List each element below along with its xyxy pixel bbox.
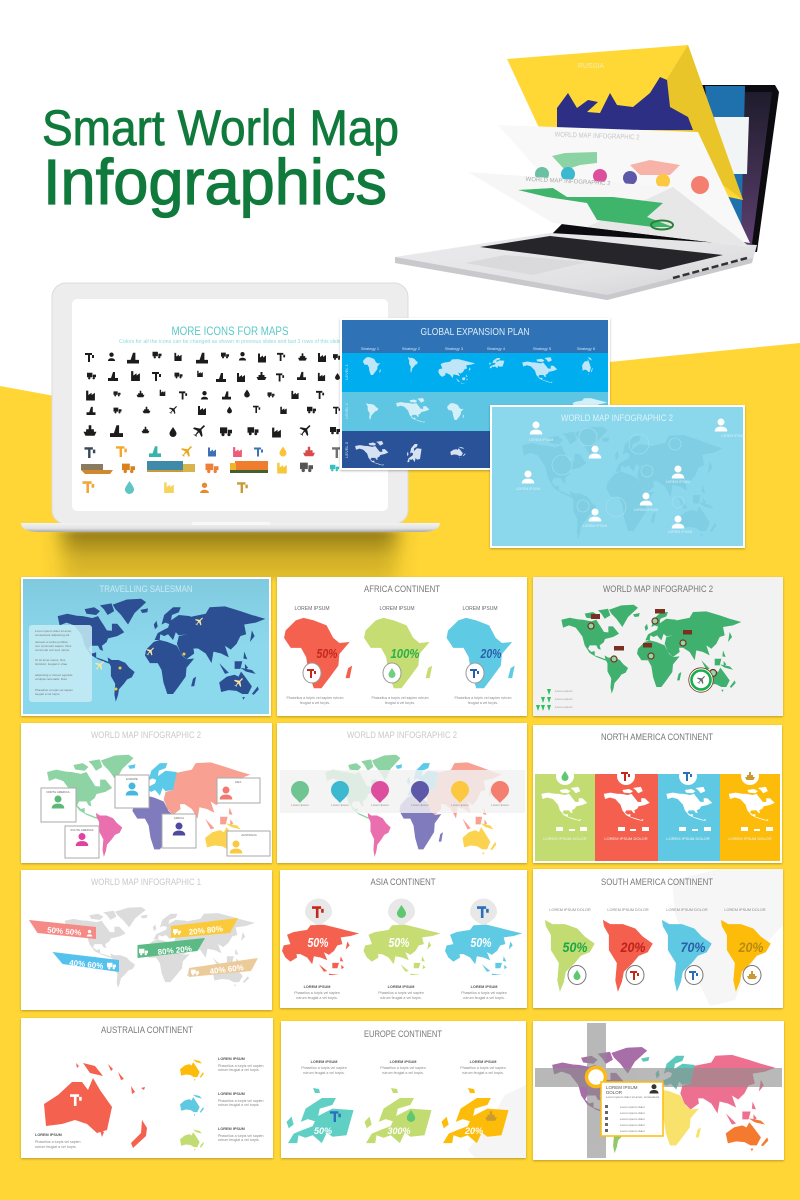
captions: feugiat a vel turpis. xyxy=(385,701,415,705)
south america card xyxy=(65,826,99,858)
person labels: LOREM IPSUM xyxy=(668,530,692,534)
icon row 1 xyxy=(85,352,341,364)
text card: tincidunt, feugiat in vitae xyxy=(35,662,68,666)
captions: rutrum feugiat a vel turpis. xyxy=(382,1071,424,1075)
icon row 2 xyxy=(87,371,340,382)
africa card xyxy=(162,814,196,848)
right captions: LOREM IPSUM xyxy=(218,1127,245,1131)
text card: volutpat venenatis. Duis xyxy=(35,677,67,681)
info card: DOLOR xyxy=(606,1090,623,1095)
column labels: LOREM IPSUM DOLOR xyxy=(666,908,708,912)
pins xyxy=(291,781,509,803)
panel title: TRAVELLING SALESMAN xyxy=(100,584,193,595)
icon badges xyxy=(303,663,484,683)
captions xyxy=(301,1060,506,1075)
strategy labels: Strategy 1 xyxy=(361,346,380,351)
text card: feugiat a vel turpis. xyxy=(35,692,60,696)
ribbon red xyxy=(29,920,96,939)
right captions: rutrum feugiat a vel turpis. xyxy=(218,1138,260,1142)
slide: Russia xyxy=(507,45,743,200)
pin labels: Lorem Ipsum xyxy=(411,803,429,807)
level 1 band xyxy=(342,353,608,392)
text card: Phasellus a turpis vel sapien xyxy=(35,688,73,692)
strategy labels xyxy=(361,346,596,351)
pin labels: Lorem Ipsum xyxy=(331,803,349,807)
ribbon green xyxy=(138,938,205,958)
text card: Aenean a varius porttitor, xyxy=(35,640,69,644)
asia maps xyxy=(282,925,522,975)
captions: LOREM IPSUM xyxy=(388,985,414,989)
plane markers xyxy=(95,618,243,687)
text card: Ut sit amet metus, finis xyxy=(35,658,66,662)
laptop shadow on background xyxy=(62,531,397,579)
captions: feugiat a vel turpis. xyxy=(468,701,498,705)
flags xyxy=(591,609,692,650)
column labels: LOREM IPSUM DOLOR xyxy=(543,836,587,841)
captions: rutrum feugiat a vel turpis. xyxy=(303,1071,345,1075)
screen subtitle: Colors for all the icons can be changed as shown in previous slides and last 3 rows of this slide xyxy=(119,339,341,345)
australia card xyxy=(227,831,270,856)
ribbon tan xyxy=(189,958,258,977)
panel: world map infographic 2 green xyxy=(533,577,783,716)
strategy labels: Strategy 6 xyxy=(577,346,596,351)
level 3 band xyxy=(342,431,608,468)
people icons xyxy=(522,419,727,528)
panel title: ASIA CONTINENT xyxy=(370,877,436,888)
south america card: SOUTH AMERICA xyxy=(70,828,94,832)
lorem labels: LOREM IPSUM xyxy=(294,606,330,612)
pin labels: Lorem Ipsum xyxy=(291,803,309,807)
africa maps xyxy=(284,618,515,688)
level labels: LEVEL 3 xyxy=(344,441,349,458)
colored vehicles row 7 xyxy=(81,461,339,474)
legend labels: Lorem ipsum xyxy=(555,697,573,701)
legend xyxy=(536,689,551,711)
grey world map xyxy=(65,907,255,988)
panel title: WORLD MAP INFOGRAPHIC 2 xyxy=(561,413,673,424)
percentages: 50% xyxy=(562,939,588,955)
green world map xyxy=(561,605,741,694)
panel background xyxy=(492,407,743,546)
level labels: LEVEL 1 xyxy=(344,363,349,380)
pin labels: Lorem Ipsum xyxy=(491,803,509,807)
person labels: LOREM IPSUM xyxy=(583,524,607,528)
captions: LOREM IPSUM xyxy=(390,1060,416,1064)
person labels: LOREM IPSUM xyxy=(529,438,553,442)
percentages xyxy=(562,939,764,955)
white bars xyxy=(556,827,773,831)
marker ring xyxy=(586,1068,606,1086)
laptop bezel xyxy=(52,283,408,524)
text card: commodo orci sed, varius xyxy=(35,648,70,652)
captions xyxy=(287,696,511,705)
legend labels: Lorem ipsum xyxy=(555,689,573,693)
right captions: Phasellus a turpis vel sapien xyxy=(218,1134,264,1138)
world map xyxy=(58,599,265,702)
captions: LOREM IPSUM xyxy=(311,1060,337,1064)
percentages: 100% xyxy=(390,647,420,661)
pin labels: Lorem Ipsum xyxy=(451,803,469,807)
laptop screen blue slide xyxy=(705,86,749,238)
legend labels xyxy=(555,689,573,709)
ribbon tan: 40% 60% xyxy=(209,963,244,976)
europe card: EUROPE xyxy=(126,777,138,781)
panel: south america continent xyxy=(533,869,783,1008)
column labels: LOREM IPSUM DOLOR xyxy=(604,836,648,841)
ports xyxy=(673,258,747,278)
level 1 maps xyxy=(363,357,593,383)
badge glyphs xyxy=(574,970,757,980)
panel: travelling salesman xyxy=(21,577,271,716)
white laptop xyxy=(21,283,440,532)
panel: north america continent xyxy=(533,725,782,863)
plan title: GLOBAL EXPANSION PLAN xyxy=(420,326,530,338)
level 3 maps xyxy=(355,441,465,465)
info card: LOREM IPSUM xyxy=(606,1085,638,1090)
icon row 4 xyxy=(86,406,340,415)
person labels: LOREM IPSUM xyxy=(666,480,690,484)
percentages xyxy=(314,1126,483,1136)
captions: Phasellus a turpis vel sapien xyxy=(294,991,340,995)
text card: Lorem ipsum dolor sit amet, xyxy=(35,629,72,633)
percentages: 20% xyxy=(480,647,502,661)
icon row 3 xyxy=(86,390,324,400)
panel: asia continent xyxy=(280,870,527,1008)
city markers xyxy=(114,652,186,690)
europe glyphs xyxy=(330,1110,497,1122)
laptop with slides fanning out xyxy=(395,45,779,300)
europe maps xyxy=(287,1098,509,1143)
info card: Lorem ipsum dolor xyxy=(620,1105,645,1109)
person labels xyxy=(516,434,745,534)
text card xyxy=(29,625,92,702)
right captions: LOREM IPSUM xyxy=(218,1057,245,1061)
strategy labels: Strategy 2 xyxy=(402,346,421,351)
captions: Phasellus a turpis vel sapien xyxy=(378,991,424,995)
colored icon row 6 xyxy=(84,446,343,458)
trackpad xyxy=(465,255,587,275)
badge glyphs xyxy=(307,668,479,678)
captions: rutrum feugiat a vel turpis. xyxy=(463,996,505,1000)
yellow background with curved top xyxy=(0,343,800,1200)
panel: australia continent xyxy=(21,1018,273,1158)
captions: rutrum feugiat a vel turpis. xyxy=(380,996,422,1000)
panel background xyxy=(23,579,269,714)
text card: non commodo sapien. Duis xyxy=(35,644,72,648)
lorem label: rutrum feugiat a vel turpis. xyxy=(35,1145,77,1149)
title xyxy=(42,100,399,218)
captions: Phasellus a turpis vel sapien xyxy=(461,991,507,995)
screen heading: MORE ICONS FOR MAPS xyxy=(172,326,289,338)
captions: feugiat a vel turpis. xyxy=(300,701,330,705)
column labels: LOREM IPSUM DOLOR xyxy=(724,908,766,912)
captions: Phasellus a turpis vel sapien rutrum xyxy=(372,696,428,700)
column labels xyxy=(543,836,772,841)
panel title: WORLD MAP INFOGRAPHIC 1 xyxy=(91,877,201,888)
continents xyxy=(552,1047,775,1153)
panel: global expansion plan xyxy=(340,318,610,470)
right captions: Phasellus a turpis vel sapien xyxy=(218,1099,264,1103)
captions: Phasellus a turpis vel sapien xyxy=(301,1066,347,1070)
info card: Lorem ipsum dolor sit amet, consectetur xyxy=(606,1095,659,1099)
percentages: 50% xyxy=(314,1126,332,1136)
column labels: LOREM IPSUM DOLOR xyxy=(666,836,710,841)
person labels: LOREM IPSUM xyxy=(516,487,540,491)
panel title: EUROPE CONTINENT xyxy=(364,1029,442,1040)
flag markers xyxy=(588,618,716,676)
text card: adipiscing a. Donec egestas xyxy=(35,673,73,677)
captions: LOREM IPSUM xyxy=(304,985,330,989)
colored icon row 8 xyxy=(82,481,248,494)
captions: rutrum feugiat a vel turpis. xyxy=(462,1071,504,1075)
white maps xyxy=(541,787,775,821)
info card: Lorem ipsum dolor xyxy=(620,1123,645,1127)
right captions: Phasellus a turpis vel sapien xyxy=(218,1064,264,1068)
strategy labels: Strategy 5 xyxy=(533,346,552,351)
icon circles xyxy=(556,767,759,785)
panel title: NORTH AMERICA CONTINENT xyxy=(601,732,713,743)
circle icons xyxy=(552,428,684,517)
pin labels xyxy=(291,803,509,807)
panel title: WORLD MAP INFOGRAPHIC 2 xyxy=(603,584,713,595)
watermark xyxy=(468,1085,526,1158)
slide: world map infographic 2 xyxy=(498,125,750,243)
slide: world map green xyxy=(468,172,750,247)
icon badges xyxy=(568,966,761,984)
africa card: AFRICA xyxy=(174,816,184,820)
info card: Lorem ipsum dolor xyxy=(620,1111,645,1115)
laptop screen lid xyxy=(550,85,779,252)
translucent band xyxy=(280,770,525,813)
ribbon green: 80% 20% xyxy=(157,944,192,957)
australia card: AUSTRALIA xyxy=(241,833,257,837)
circle glyphs xyxy=(562,771,755,781)
captions: Phasellus a turpis vel sapien xyxy=(380,1066,426,1070)
text card: consectetur adipiscing elit xyxy=(35,633,70,637)
captions: Phasellus a turpis vel sapien rutrum xyxy=(287,696,343,700)
slide: world map green: WORLD MAP INFOGRAPHIC 2 xyxy=(525,177,611,187)
percentages: 50% xyxy=(316,647,338,661)
faded world map xyxy=(522,426,723,539)
ribbon yellow xyxy=(171,918,238,938)
level labels xyxy=(344,363,349,458)
percentages: 50% xyxy=(308,936,328,950)
continents xyxy=(47,755,250,857)
header band xyxy=(342,320,608,353)
info card xyxy=(601,1082,663,1136)
percentages: 20% xyxy=(620,939,646,955)
percentages: 50% xyxy=(388,936,410,950)
percentages: 50% xyxy=(470,936,492,950)
continents xyxy=(325,755,502,857)
keyboard xyxy=(480,236,723,270)
iceland blobs xyxy=(313,1088,475,1093)
level labels: LEVEL 2 xyxy=(344,402,349,419)
europe card xyxy=(115,775,149,808)
lorem label xyxy=(35,1133,81,1149)
column labels: LOREM IPSUM DOLOR xyxy=(607,908,649,912)
captions: Phasellus a turpis vel sapien xyxy=(460,1066,506,1070)
teardrops xyxy=(305,898,497,927)
panel: world map with person cards xyxy=(21,723,272,863)
panel: europe continent xyxy=(281,1021,526,1158)
percentages: 70% xyxy=(680,939,706,955)
panel: africa continent xyxy=(277,577,527,716)
lorem label: LOREM IPSUM xyxy=(35,1133,62,1137)
slide: Russia: RUSSIA xyxy=(578,63,604,70)
large australia map xyxy=(44,1078,112,1133)
north america card xyxy=(41,788,76,822)
colored columns xyxy=(535,774,780,861)
lorem labels: LOREM IPSUM xyxy=(379,606,415,612)
ribbon red: 50% 50% xyxy=(47,926,82,937)
strategy labels: Strategy 4 xyxy=(487,346,506,351)
level 2 maps xyxy=(366,398,607,422)
percentages: 20% xyxy=(464,1126,483,1136)
strategy labels: Strategy 3 xyxy=(445,346,464,351)
right captions: rutrum feugiat a vel turpis. xyxy=(218,1103,260,1107)
info card: Lorem ipsum dolor xyxy=(620,1117,645,1121)
laptop front edge xyxy=(395,257,753,300)
ribbon blue: 40% 60% xyxy=(69,958,104,971)
person labels: LOREM IPSUM xyxy=(721,434,745,438)
right captions: LOREM IPSUM xyxy=(218,1092,245,1096)
ribbon yellow: 20% 80% xyxy=(188,924,223,937)
pin labels: Lorem Ipsum xyxy=(371,803,389,807)
captions: Phasellus a turpis vel sapien rutrum xyxy=(455,696,511,700)
surrounding islands xyxy=(76,1063,147,1148)
cross bands xyxy=(535,1023,782,1158)
title: Smart World Map xyxy=(42,100,399,156)
legend labels: Lorem ipsum xyxy=(555,705,573,709)
lorem label: Phasellus a turpis vel sapien xyxy=(35,1140,81,1144)
laptop base xyxy=(395,233,757,300)
laptop base xyxy=(21,522,440,532)
lorem labels: LOREM IPSUM xyxy=(462,606,498,612)
percentages xyxy=(308,936,492,950)
laptop screen xyxy=(72,299,388,511)
south america maps xyxy=(545,920,771,992)
column labels: LOREM IPSUM DOLOR xyxy=(728,836,772,841)
column labels xyxy=(549,908,766,912)
captions: LOREM IPSUM xyxy=(471,985,497,989)
panel title: AUSTRALIA CONTINENT xyxy=(101,1025,193,1036)
title: Infographics xyxy=(43,146,387,218)
medical glyph xyxy=(70,1094,82,1106)
ribbon blue xyxy=(52,952,119,972)
asia card: ASIA xyxy=(235,780,241,784)
panel title: WORLD MAP INFOGRAPHIC 2 xyxy=(347,730,457,741)
laptop screen wallpaper xyxy=(705,87,772,244)
lorem labels xyxy=(294,606,498,612)
north america card: NORTH AMERICA xyxy=(46,790,70,794)
percentages: 300% xyxy=(387,1126,411,1136)
panel: world map with pins xyxy=(277,723,527,863)
right captions xyxy=(218,1057,264,1142)
watermark shape xyxy=(672,869,783,1006)
level 2 band xyxy=(342,392,608,431)
asia card xyxy=(217,778,260,803)
panel title: WORLD MAP INFOGRAPHIC 2 xyxy=(91,730,201,741)
column labels: LOREM IPSUM DOLOR xyxy=(549,908,591,912)
recycle badge xyxy=(689,668,713,692)
person labels: LOREM IPSUM xyxy=(634,508,658,512)
right captions: rutrum feugiat a vel turpis. xyxy=(218,1068,260,1072)
teardrop glyphs xyxy=(312,905,489,918)
percentages xyxy=(316,647,502,661)
small australia green xyxy=(180,1129,204,1151)
panel title: SOUTH AMERICA CONTINENT xyxy=(601,877,713,888)
panel: world map infographic 2 with people xyxy=(490,405,745,548)
panel: world map crosshair xyxy=(533,1021,784,1160)
panel title: AFRICA CONTINENT xyxy=(364,584,440,595)
icon row 5 xyxy=(84,425,340,438)
panel: world map infographic 1 ribbons xyxy=(21,870,272,1010)
captions xyxy=(294,985,507,1000)
percentages: 20% xyxy=(738,939,764,955)
captions: rutrum feugiat a vel turpis. xyxy=(296,996,338,1000)
small australia blue xyxy=(180,1094,204,1116)
captions: LOREM IPSUM xyxy=(470,1060,496,1064)
small australia amber xyxy=(180,1059,204,1081)
info card: Lorem ipsum dolor xyxy=(620,1129,645,1133)
slide: world map infographic 2: WORLD MAP INFOGRAPHIC 2 xyxy=(554,132,640,141)
